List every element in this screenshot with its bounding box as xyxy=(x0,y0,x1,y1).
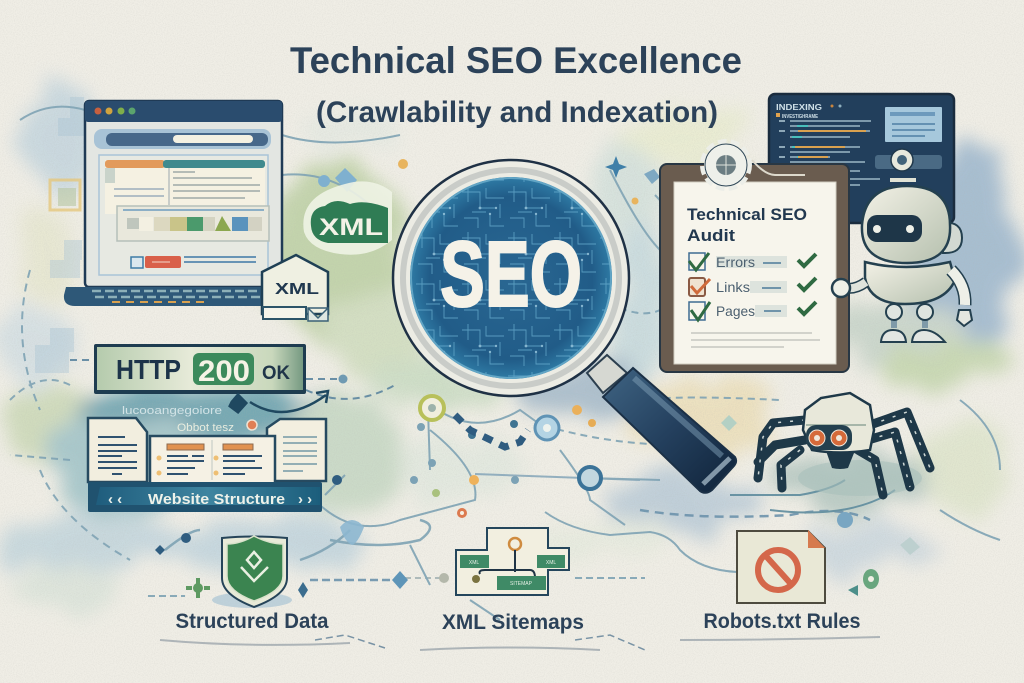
checklist: Links: Links xyxy=(716,279,750,295)
small blurred labels xyxy=(122,405,257,434)
icon: XML cloud badge: XML xyxy=(319,214,383,241)
title: Technical SEO Excellence xyxy=(290,40,742,81)
website structure panel xyxy=(88,374,348,512)
audit heading: Technical SEO xyxy=(687,205,807,224)
audit clipboard: Audit xyxy=(687,226,735,245)
label: Robots.txt Rules: Robots.txt Rules xyxy=(704,610,860,633)
icon: structured data shield xyxy=(212,536,292,608)
HTTP 200 OK status bar xyxy=(94,344,306,394)
robot visor xyxy=(867,215,922,242)
title xyxy=(290,40,742,129)
SEO text: SEO xyxy=(440,222,582,326)
website structure banner: › › xyxy=(298,491,312,508)
right document xyxy=(267,419,326,481)
checklist: Links xyxy=(689,278,816,296)
dashboard screen: indexing xyxy=(769,94,954,223)
dashboard screen: indexing: INDEXING xyxy=(776,103,822,112)
website structure banner: ‹ ‹ xyxy=(108,491,122,508)
dashboard screen: indexing: INVESTIGHRAME xyxy=(782,114,819,120)
icon: XML sitemap flowchart: XML xyxy=(546,560,556,566)
checklist: Pages: Pages xyxy=(716,303,755,319)
handle xyxy=(587,355,736,493)
robot torso xyxy=(865,262,955,304)
crawler spider xyxy=(758,393,930,496)
icon: XML file tag xyxy=(262,255,328,321)
small blurred labels: Obbot tesz xyxy=(177,422,234,434)
checklist: Errors: Errors xyxy=(716,254,755,270)
centre document xyxy=(150,436,275,486)
small blurred labels: lucooangegoiore xyxy=(122,405,222,417)
checklist: Errors xyxy=(689,253,816,270)
map nodes and sparkles xyxy=(50,156,920,598)
icon: XML file tag: XML xyxy=(275,281,319,298)
left document xyxy=(88,418,147,482)
title: (Crawlability and Indexation) xyxy=(316,96,718,129)
lens with circuit pattern xyxy=(409,176,613,380)
HTTP 200 OK status bar: OK xyxy=(262,363,290,384)
gear clip xyxy=(704,143,805,187)
robot ear xyxy=(943,223,962,253)
audit paper xyxy=(674,182,836,364)
label: XML Sitemaps: XML Sitemaps xyxy=(442,611,584,634)
icon: robots.txt document with prohibition sign xyxy=(737,530,825,603)
laptop with web page xyxy=(64,101,282,306)
network paths and nodes xyxy=(10,107,1000,650)
icon: XML sitemap flowchart xyxy=(456,528,569,595)
website structure banner: Website Structure xyxy=(148,491,285,508)
lens rim xyxy=(393,160,629,396)
icon: XML cloud badge xyxy=(303,181,392,255)
robot head xyxy=(862,186,950,263)
icon: XML sitemap flowchart: XML xyxy=(469,560,479,566)
label: Structured Data: Structured Data xyxy=(176,610,329,633)
magnifying glass xyxy=(393,160,736,493)
icon: XML sitemap flowchart: SITEMAP xyxy=(510,581,533,587)
HTTP 200 OK status bar: 200 xyxy=(198,355,250,388)
robot mascot xyxy=(832,149,972,342)
website structure banner xyxy=(88,482,322,512)
connector arrow icon xyxy=(230,374,348,485)
robot arms xyxy=(832,270,972,326)
HTTP 200 OK status bar: HTTP xyxy=(116,354,181,385)
audit clipboard xyxy=(660,143,849,372)
checklist: Pages xyxy=(689,302,816,320)
robot legs xyxy=(881,304,945,342)
